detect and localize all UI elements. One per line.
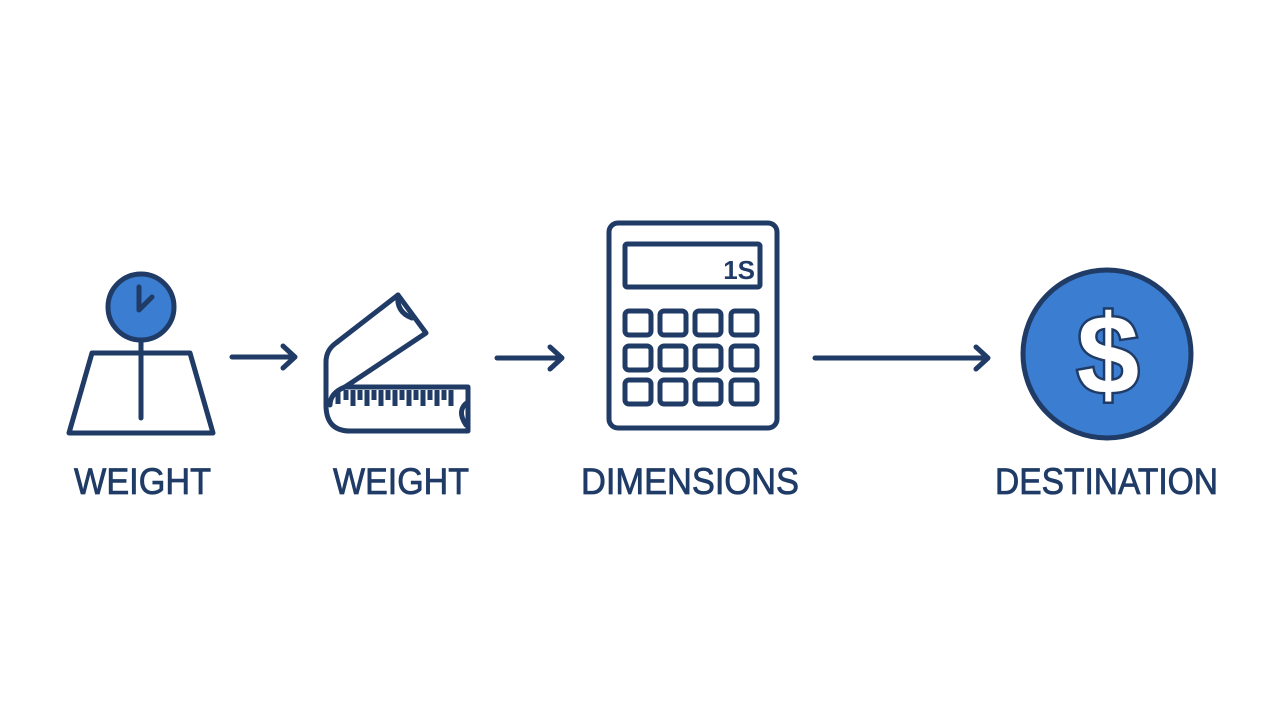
label: destination: DESTINATION xyxy=(995,461,1218,502)
arrow 2 xyxy=(497,347,562,369)
label: weight 1: WEIGHT xyxy=(74,461,211,502)
label: dimensions: DIMENSIONS xyxy=(581,461,799,502)
icon: dollar coin: $ xyxy=(1077,292,1139,417)
icon: tape measure xyxy=(326,295,468,431)
label: weight 2: WEIGHT xyxy=(333,461,469,502)
icon: scale xyxy=(69,274,213,433)
arrow 3 xyxy=(815,347,988,369)
arrow 1 xyxy=(232,346,295,368)
icon: calculator xyxy=(609,223,777,428)
calculator display text: 1S xyxy=(723,255,755,285)
icon: dollar coin xyxy=(1023,270,1191,438)
